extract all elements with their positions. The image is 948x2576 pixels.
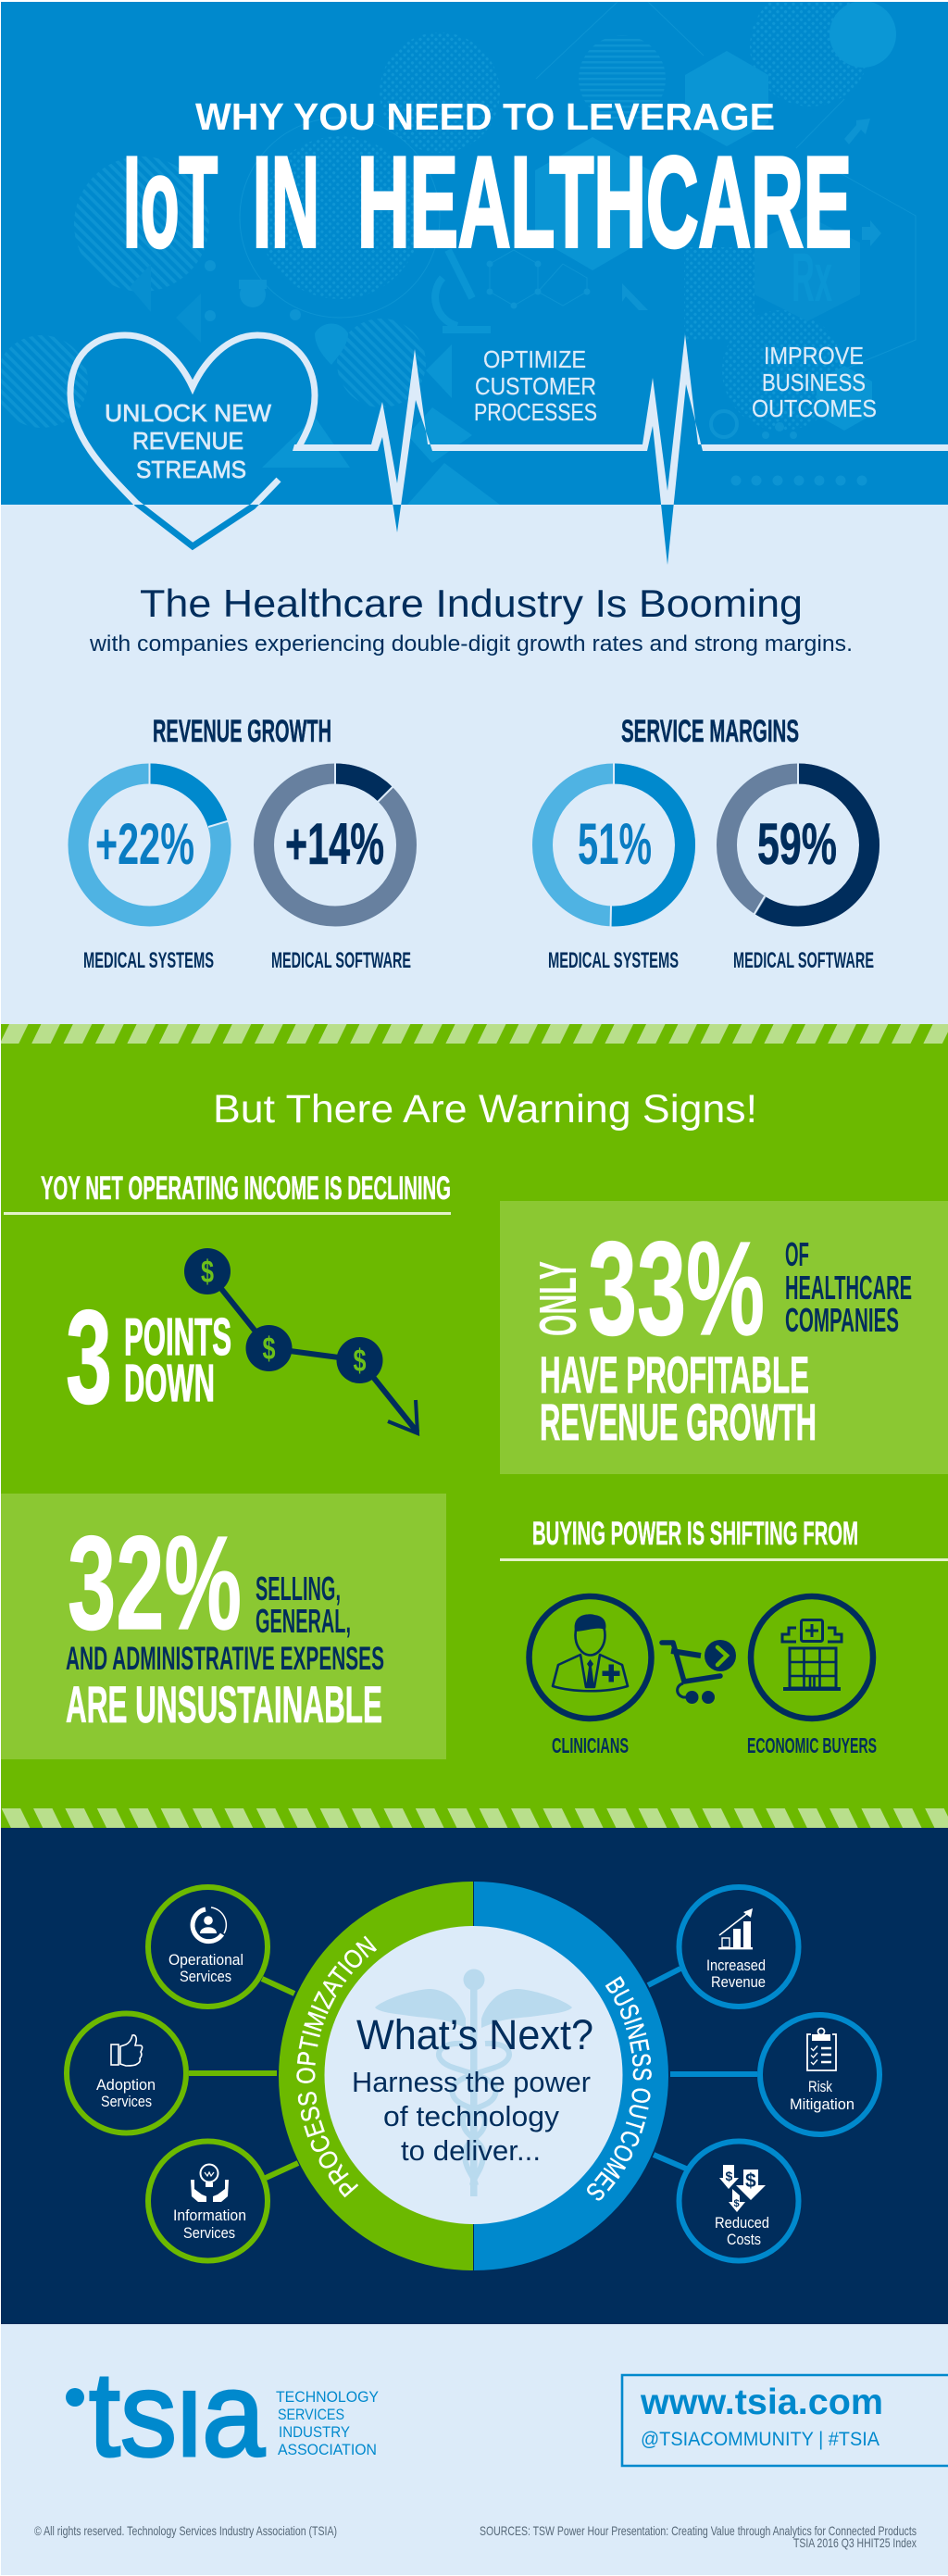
text	[706, 1957, 766, 1991]
panel: header background	[0, 0, 948, 505]
text: harness the power of technology to deliver: Harness the power	[352, 2066, 591, 2098]
panel: only 33%	[500, 1201, 948, 1474]
title: IoT in healthcare: IoT	[123, 131, 218, 274]
chart: falling dollar coins with arrow: $	[354, 1344, 367, 1379]
text: Operational	[168, 1951, 243, 1969]
icon: person in ring	[193, 1907, 226, 1942]
social handles: @TSIACOMMUNITY | #TSIA	[641, 2429, 879, 2450]
icon: clinician in circle	[530, 1596, 652, 1719]
text: of healthcare companies: OF	[785, 1235, 809, 1273]
node: increased revenue	[680, 1887, 798, 2007]
donut: +14% medical software	[264, 761, 406, 917]
text	[96, 2076, 156, 2110]
text: have profitable revenue growth	[540, 1345, 817, 1451]
text: harness the power of technology to deliver: of technology	[383, 2100, 560, 2132]
copyright: © All rights reserved. Technology Services Industry Association (TSIA)	[34, 2523, 337, 2538]
chart: falling dollar coins with arrow	[184, 1248, 418, 1433]
label: medical systems: MEDICAL SYSTEMS	[83, 948, 214, 973]
node: operational services	[148, 1887, 268, 2007]
text: optimize customer processes: CUSTOMER	[475, 372, 596, 400]
title: why you need to leverage: WHY YOU NEED TO LEVERAGE	[195, 95, 775, 138]
callout: website box	[622, 2375, 948, 2466]
node: risk mitigation	[760, 2015, 879, 2134]
connector lines	[189, 1969, 757, 2178]
icon: falling dollar arrows	[719, 2165, 766, 2212]
donut: +14% medical software: +14%	[285, 812, 384, 877]
curved label: process optimization: PROCESS OPTIMIZATION	[296, 1935, 378, 2198]
text: unlock new revenue streams: UNLOCK NEW	[105, 399, 271, 427]
bottom stripe band	[1, 1808, 948, 1828]
logo text: technology services industry association	[276, 2388, 379, 2458]
text: improve business outcomes: OUTCOMES	[752, 394, 877, 422]
heading: yoy net operating income: YOY NET OPERATING INCOME IS DECLINING	[41, 1170, 451, 1207]
text: selling, general, and administrative expenses	[66, 1569, 384, 1677]
icon: thumbs up	[111, 2035, 143, 2066]
text: Information	[173, 2207, 246, 2224]
donut: 59% medical software: 59%	[757, 812, 837, 877]
icon: rising bars	[718, 1908, 753, 1949]
subheading: with companies experiencing double-digit growth rates and strong margins.	[89, 631, 853, 657]
rotated only label: ONLY	[529, 1261, 588, 1336]
icon: falling dollar arrows: $	[733, 2198, 740, 2209]
heart outline and heartbeat line	[70, 334, 948, 565]
donut: 59% medical software	[727, 761, 869, 917]
text: Mitigation	[790, 2095, 854, 2113]
website url: www.tsia.com	[640, 2382, 883, 2422]
text: unlock new revenue streams: REVENUE	[132, 427, 243, 455]
text: optimize customer processes: PROCESSES	[474, 398, 597, 426]
panel: header background: Rx	[792, 239, 832, 316]
node: information services	[148, 2141, 268, 2261]
text: selling, general, and administrative expenses: GENERAL,	[256, 1602, 351, 1640]
title: IoT in healthcare: IN	[253, 131, 319, 274]
logo text: technology services industry association: SERVICES	[278, 2406, 344, 2423]
text: Adoption	[96, 2076, 156, 2094]
donut: 51% medical systems	[543, 761, 685, 929]
text: improve business outcomes: IMPROVE	[764, 342, 864, 369]
top stripe band	[1, 1024, 948, 1044]
label: medical systems: MEDICAL SYSTEMS	[548, 948, 679, 973]
text: Revenue	[711, 1973, 766, 1991]
text	[790, 2078, 854, 2113]
text: harness the power of technology to deliver	[352, 2066, 591, 2167]
text	[173, 2207, 246, 2242]
text: optimize customer processes	[474, 345, 597, 426]
text: selling, general, and administrative expenses: AND ADMINISTRATIVE EXPENSES	[66, 1641, 384, 1677]
stat: 3 points down: 3	[66, 1282, 112, 1432]
panel: light section background	[1, 505, 948, 1024]
node: adoption services	[67, 2013, 186, 2133]
icon: hospital building in circle	[751, 1596, 873, 1719]
donut: 51% medical systems: 51%	[578, 812, 652, 877]
chart: falling dollar coins with arrow: $	[263, 1332, 276, 1367]
text: Increased	[706, 1957, 766, 1974]
stat: 3 points down: POINTS	[124, 1307, 231, 1367]
heading: but there are warning signs: But There Are Warning Signs!	[213, 1087, 757, 1132]
text: harness the power of technology to deliver: to deliver...	[401, 2134, 541, 2167]
text: Services	[101, 2093, 152, 2110]
node: reduced costs	[680, 2141, 798, 2261]
heading: revenue growth: REVENUE GROWTH	[153, 714, 331, 749]
sources	[480, 2523, 917, 2550]
text: unlock new revenue streams: STREAMS	[136, 456, 246, 483]
logo text: technology services industry association: ASSOCIATION	[278, 2441, 377, 2458]
text: improve business outcomes	[752, 342, 877, 422]
logo text: technology services industry association: INDUSTRY	[279, 2423, 350, 2441]
icon: falling dollar arrows: $	[726, 2169, 733, 2183]
panel: green section background	[1, 1024, 948, 1829]
text: unlock new revenue streams	[105, 399, 271, 483]
stat: 32%: 32%	[68, 1508, 242, 1657]
text: of healthcare companies	[785, 1235, 912, 1339]
donut: +22% medical systems	[78, 761, 233, 917]
icon: lightbulb in hands	[191, 2165, 229, 2202]
donut: +22% medical systems: +22%	[95, 812, 194, 877]
label: clinicians: CLINICIANS	[552, 1733, 629, 1757]
text: Risk	[808, 2078, 832, 2095]
logo: tsia: tsia	[89, 2346, 266, 2482]
panel: footer background	[1, 2324, 948, 2575]
panel: navy what's next section	[1, 1828, 948, 2324]
stat: 3 points down: DOWN	[124, 1354, 215, 1413]
chart: falling dollar coins with arrow: $	[201, 1255, 214, 1290]
title: IoT in healthcare	[123, 131, 852, 274]
stat: 33%: 33%	[588, 1214, 765, 1363]
panel: 32% expenses	[1, 1494, 446, 1759]
text: are unsustainable: ARE UNSUSTAINABLE	[66, 1675, 382, 1733]
text: Reduced	[715, 2214, 769, 2232]
text	[168, 1951, 243, 1985]
icon: clipboard checklist	[807, 2028, 836, 2070]
heading: what's next: What’s Next?	[356, 2011, 593, 2058]
heading: the healthcare industry is booming: The Healthcare Industry Is Booming	[140, 581, 803, 625]
curved label: business outcomes: BUSINESS OUTCOMES	[587, 1976, 652, 2200]
label: medical software: MEDICAL SOFTWARE	[271, 948, 411, 973]
central wheel	[279, 1882, 668, 2270]
logo text: technology services industry association: TECHNOLOGY	[276, 2388, 379, 2406]
text: optimize customer processes: OPTIMIZE	[483, 345, 586, 373]
icon: shopping cart with arrow	[662, 1640, 736, 1704]
text: Services	[180, 1968, 231, 1985]
text: improve business outcomes: BUSINESS	[762, 369, 866, 396]
text: selling, general, and administrative expenses: SELLING,	[256, 1569, 341, 1607]
heading: service margins: SERVICE MARGINS	[621, 714, 799, 749]
text: Costs	[727, 2231, 761, 2248]
text: Services	[183, 2224, 235, 2242]
icon: falling dollar arrows: $	[745, 2170, 756, 2192]
stat: 3 points down	[66, 1282, 231, 1432]
caduceus watermark	[375, 1969, 572, 2196]
text	[715, 2214, 769, 2248]
